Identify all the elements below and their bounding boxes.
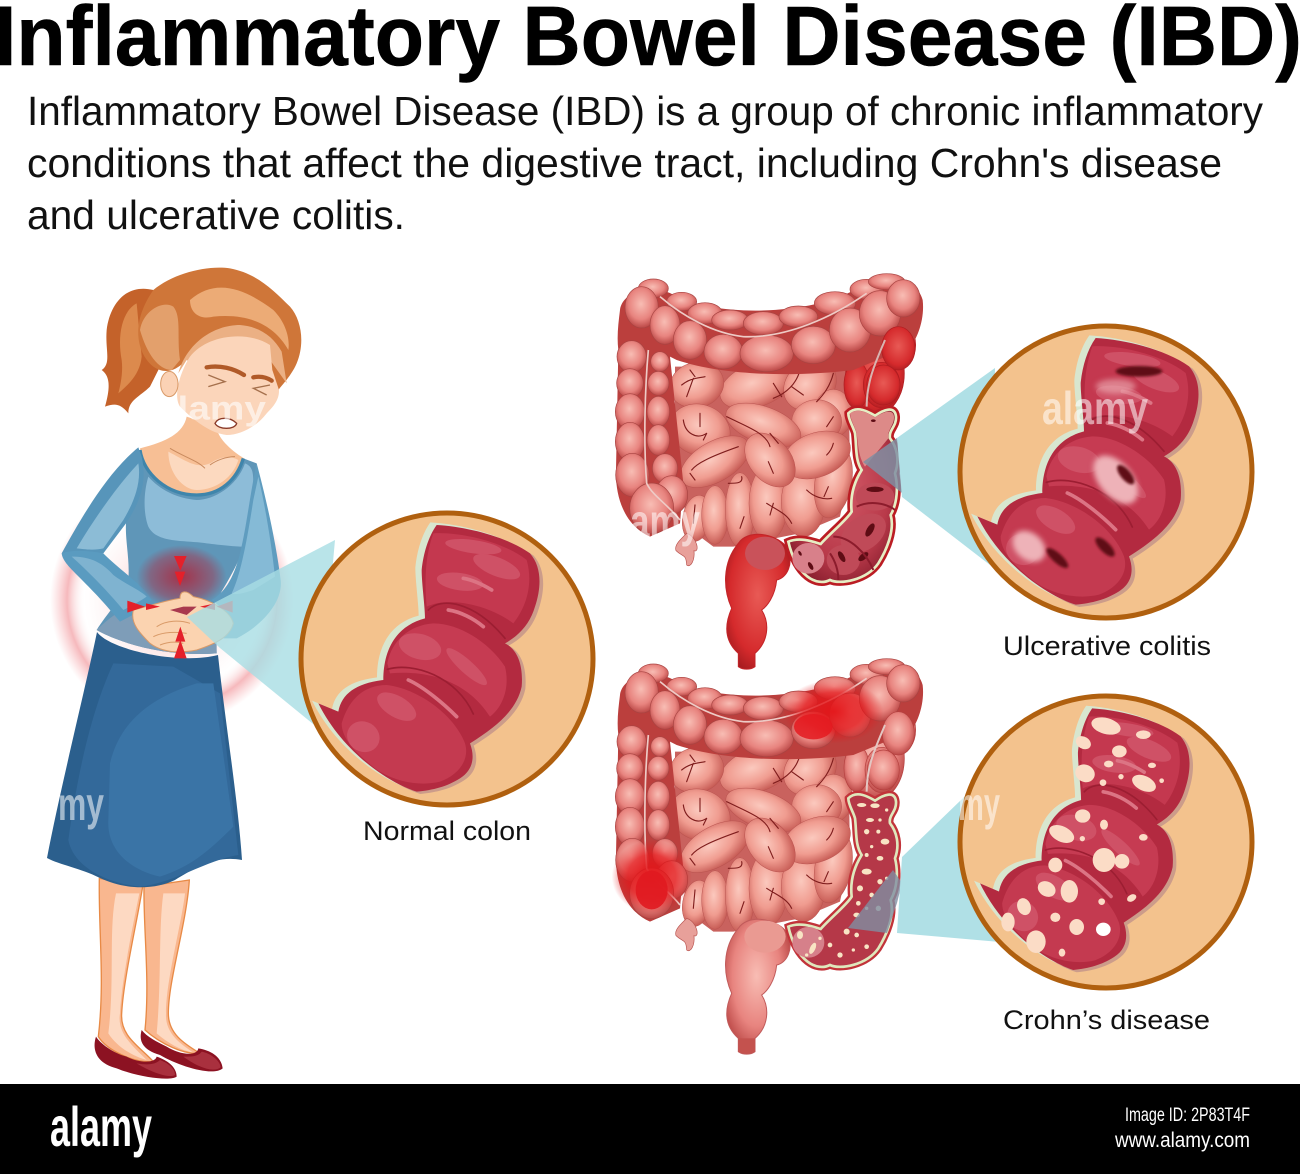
right shoe: [141, 1030, 223, 1071]
closed eyes: [208, 375, 270, 395]
skirt: [47, 632, 242, 887]
intestines: ulcerative colitis: [615, 274, 923, 669]
ponytail highlight: [118, 303, 142, 393]
overlap of cone on Crohn's colon: [848, 870, 902, 933]
magnifier cone: ulcerative colitis: [897, 368, 995, 565]
lobes: [792, 483, 894, 575]
rectum head: [744, 921, 786, 953]
leg highlights: [108, 893, 193, 1060]
label: normal colon: Normal colon: [363, 816, 531, 846]
magnifier cone: normal colon: [187, 540, 335, 728]
label: Crohn's disease: Crohn’s disease: [1003, 1005, 1210, 1035]
intestines: Crohn's disease: [612, 659, 923, 1054]
diseased section rim: [788, 409, 897, 582]
red pain arrows: [127, 556, 233, 658]
description text: [27, 88, 1263, 238]
description text: conditions that affect the digestive tract, including Crohn's disease: [27, 140, 1222, 186]
skirt light panel: [108, 683, 233, 877]
diseased section: [788, 794, 897, 967]
inflamed descending colon back: [844, 321, 916, 415]
image id: Image ID: 2P83T4F: [1125, 1105, 1250, 1126]
rectum tip: [738, 1038, 755, 1054]
site address: www.alamy.com: [1114, 1129, 1250, 1152]
left forearm highlight: [72, 557, 147, 610]
label: ulcerative colitis: Ulcerative colitis: [1003, 631, 1211, 661]
upper pale segment: [850, 411, 894, 467]
callout circle: Crohn's disease: [960, 696, 1252, 988]
right arm highlight: [232, 477, 275, 594]
description text: Inflammatory Bowel Disease (IBD) is a group of chronic inflammatory: [27, 88, 1263, 134]
overlap of cone on ulcerative colon: [863, 438, 902, 493]
chest highlight: [168, 452, 238, 490]
footer bar: [0, 1084, 1300, 1174]
watermarks: my: [58, 778, 104, 830]
descending colon front: [867, 712, 914, 790]
last lobe lighter: [792, 927, 824, 958]
ulcer holes: [798, 419, 884, 571]
legs and shoes: [95, 878, 223, 1079]
mouth: [215, 418, 237, 428]
white spots: [797, 803, 889, 958]
inflamed patch: cecum glow: [612, 840, 692, 913]
left shoe: [95, 1037, 177, 1079]
hair left highlight: [140, 305, 180, 370]
blue top torso: [97, 450, 257, 654]
left leg: [98, 878, 153, 1062]
rectum: [726, 534, 790, 669]
red inflamed patch: transverse colon: [783, 680, 883, 743]
illustration: woman with abdominal pain: [47, 268, 301, 1079]
colon centre strip: [867, 340, 885, 407]
hair top highlight: [190, 288, 289, 350]
chest light patch: [145, 463, 253, 547]
description text: and ulcerative colitis.: [27, 192, 405, 238]
watermarks: [58, 382, 1148, 830]
collar bones: [170, 448, 235, 468]
pain gradient: [137, 545, 227, 608]
inner pain gap: [170, 607, 197, 615]
skirt mid panel: [68, 663, 238, 887]
hands: [133, 592, 233, 652]
magnifier cone: Crohn's disease: [897, 772, 1000, 942]
watermarks: my: [958, 778, 1000, 830]
right arm: [212, 463, 281, 638]
ponytail: [102, 289, 163, 413]
ulcer halos: [1006, 379, 1147, 568]
upper body group: [62, 268, 301, 658]
neck and chest: [140, 417, 244, 495]
band lines: [830, 503, 895, 580]
right leg: [144, 880, 200, 1053]
finger lines: [153, 621, 190, 645]
pain glow rings: [50, 475, 294, 725]
lesion spots: [1001, 714, 1164, 957]
left upper arm: [62, 447, 144, 555]
callout circle: ulcerative colitis: [960, 326, 1252, 618]
descending colon back: [844, 706, 916, 800]
footer logo: alamy: [50, 1095, 152, 1158]
eyebrows: [207, 367, 272, 381]
rectum head: [745, 537, 785, 570]
left upper arm highlight: [77, 463, 139, 550]
diseased section rim: [788, 794, 897, 967]
watermarks: amy: [630, 495, 700, 547]
hairline rim: [178, 325, 287, 383]
diseased section: [788, 409, 897, 582]
callout circle: normal colon: [301, 513, 593, 805]
main hair: [138, 268, 301, 390]
lesion bright spot: [1096, 923, 1111, 936]
waist lighter: [97, 607, 217, 654]
red inflamed patch: transverse colon core: [794, 714, 833, 739]
ulcer openings: [1044, 366, 1162, 571]
inflamed patch: cecum core: [636, 871, 668, 909]
shoe toe highlights: [137, 1052, 221, 1076]
collar: [140, 450, 243, 495]
face: [177, 336, 279, 435]
left forearm: [62, 551, 152, 622]
ear: [161, 371, 178, 397]
colon centre strip: [867, 725, 885, 792]
watermarks: alamy: [1042, 382, 1148, 434]
watermark on face: alamy: [156, 390, 267, 427]
rectum pale: [726, 919, 790, 1054]
inflamed descending colon front: [867, 327, 915, 405]
